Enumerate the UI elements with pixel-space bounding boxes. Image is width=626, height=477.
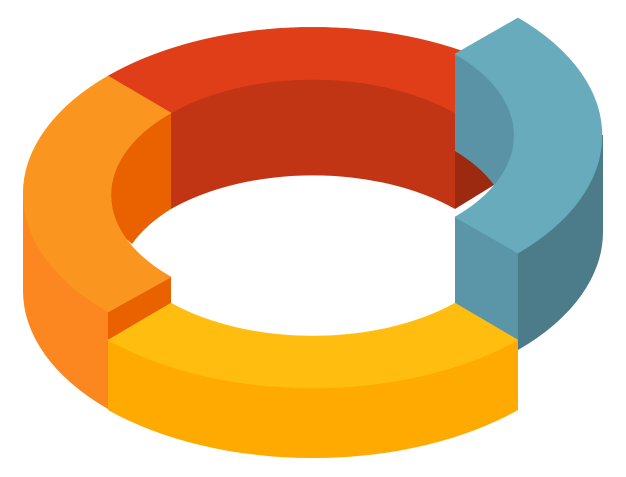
yellow top surface <box>108 303 518 388</box>
orange top surface <box>23 76 171 312</box>
orange outer side <box>23 194 108 409</box>
orange end face <box>108 277 171 345</box>
segment: red <box>108 27 494 209</box>
teal inner wall <box>455 54 530 185</box>
red wall shaded end <box>455 148 494 209</box>
teal end face <box>455 217 518 350</box>
segment: orange <box>23 76 171 409</box>
yellow outer side <box>108 340 518 458</box>
orange inner wall <box>105 113 171 244</box>
teal outer side <box>514 135 603 350</box>
segment: yellow <box>108 303 518 458</box>
red inner wall <box>171 75 455 209</box>
red top surface <box>108 27 462 113</box>
segment: teal <box>455 18 603 350</box>
teal top surface <box>455 18 602 253</box>
